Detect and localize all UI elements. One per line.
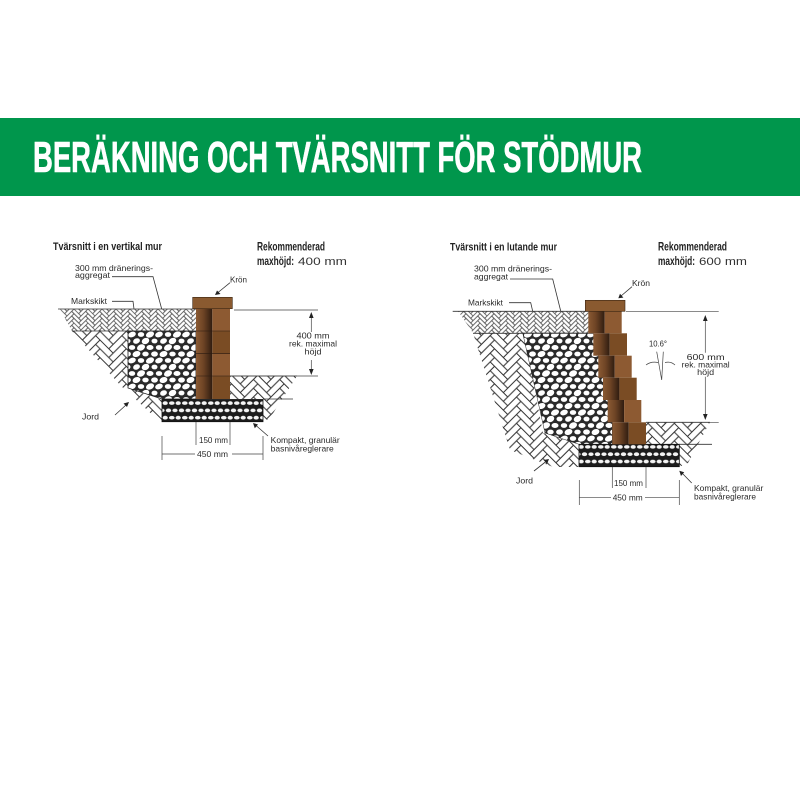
capstone bbox=[585, 300, 625, 311]
recommended max height: 400 mm: maxhöjd: bbox=[257, 254, 294, 268]
height dimension 600 mm bbox=[626, 312, 730, 422]
recommended max height: 600 mm bbox=[658, 240, 747, 268]
label: cap bbox=[618, 278, 650, 298]
label: drainage aggregate: aggregat bbox=[474, 271, 509, 281]
label: cap: Krön bbox=[632, 278, 650, 288]
ground lines bbox=[453, 311, 712, 444]
dimension 150 mm: 150 mm bbox=[614, 478, 643, 488]
label: drainage aggregate: 300 mm dränerings- bbox=[474, 264, 552, 274]
topsoil layer bbox=[60, 309, 196, 331]
label: topsoil: Markskikt bbox=[468, 298, 504, 308]
label: compact granular base: basnivåreglerare bbox=[271, 444, 334, 454]
label: cap: Krön bbox=[230, 274, 247, 284]
recommended max height: 400 mm: 400 mm bbox=[298, 256, 347, 268]
panel: vertical wall cross-section bbox=[53, 240, 347, 460]
batter angle 10.6 degrees bbox=[646, 339, 675, 380]
label: cap bbox=[215, 274, 247, 295]
height dimension 400 mm: rek. maximal bbox=[289, 339, 337, 349]
height dimension 400 mm bbox=[230, 310, 337, 376]
label: compact granular base: Kompakt, granulär bbox=[694, 483, 764, 493]
heading: sloped wall: Tvärsnitt i en lutande mur bbox=[450, 242, 558, 254]
dimension 450 mm: 450 mm bbox=[613, 493, 643, 503]
drainage aggregate bbox=[128, 331, 196, 399]
batter angle 10.6 degrees: 10.6° bbox=[649, 339, 667, 349]
recommended max height: 600 mm: maxhöjd: bbox=[658, 254, 695, 268]
label: soil: Jord bbox=[82, 411, 99, 421]
label: soil bbox=[82, 402, 129, 421]
wall blocks bbox=[588, 311, 646, 444]
label: topsoil: Markskikt bbox=[71, 296, 108, 306]
heading: vertical wall: Tvärsnitt i en vertikal mur bbox=[53, 241, 163, 253]
dimension 150 mm bbox=[196, 422, 230, 445]
recommended max height: 400 mm: Rekommenderad bbox=[257, 240, 325, 254]
label: soil: Jord bbox=[516, 475, 533, 485]
label: compact granular base bbox=[679, 471, 764, 501]
wall blocks bbox=[196, 309, 230, 399]
height dimension 400 mm: höjd bbox=[304, 346, 322, 356]
dimension 450 mm bbox=[162, 436, 263, 460]
label: compact granular base: Kompakt, granulär bbox=[271, 435, 340, 445]
soil hatch bbox=[72, 331, 297, 422]
dimension 450 mm: 450 mm bbox=[197, 449, 228, 459]
label: compact granular base: basnivåreglerare bbox=[694, 491, 756, 501]
label: compact granular base bbox=[253, 423, 340, 454]
topsoil layer bbox=[458, 311, 593, 333]
soil hatch bbox=[473, 333, 710, 467]
recommended max height: 600 mm: 600 mm bbox=[699, 256, 747, 268]
dimension 450 mm bbox=[579, 480, 679, 505]
compact granular base bbox=[579, 444, 679, 467]
ground lines bbox=[58, 309, 297, 399]
recommended max height: 600 mm: Rekommenderad bbox=[658, 240, 727, 254]
label: drainage aggregate: 300 mm dränerings- bbox=[75, 263, 153, 273]
label: drainage aggregate bbox=[474, 264, 561, 311]
height dimension 600 mm: höjd bbox=[697, 367, 715, 377]
recommended max height: 400 mm bbox=[257, 240, 347, 268]
label: soil bbox=[516, 459, 549, 485]
title banner bbox=[0, 118, 800, 196]
dimension 150 mm bbox=[612, 467, 646, 488]
label: topsoil bbox=[468, 298, 533, 311]
label: drainage aggregate bbox=[75, 263, 162, 309]
label: drainage aggregate: aggregat bbox=[75, 270, 111, 280]
height dimension 600 mm: 600 mm bbox=[687, 352, 725, 362]
drainage aggregate bbox=[523, 333, 612, 444]
height dimension 400 mm: 400 mm bbox=[296, 331, 330, 341]
dimension 150 mm: 150 mm bbox=[199, 435, 228, 445]
compact granular base bbox=[162, 400, 263, 422]
height dimension 600 mm: rek. maximal bbox=[682, 360, 730, 370]
label: topsoil bbox=[71, 296, 134, 309]
capstone bbox=[193, 297, 232, 309]
panel: sloped wall cross-section bbox=[450, 240, 764, 505]
